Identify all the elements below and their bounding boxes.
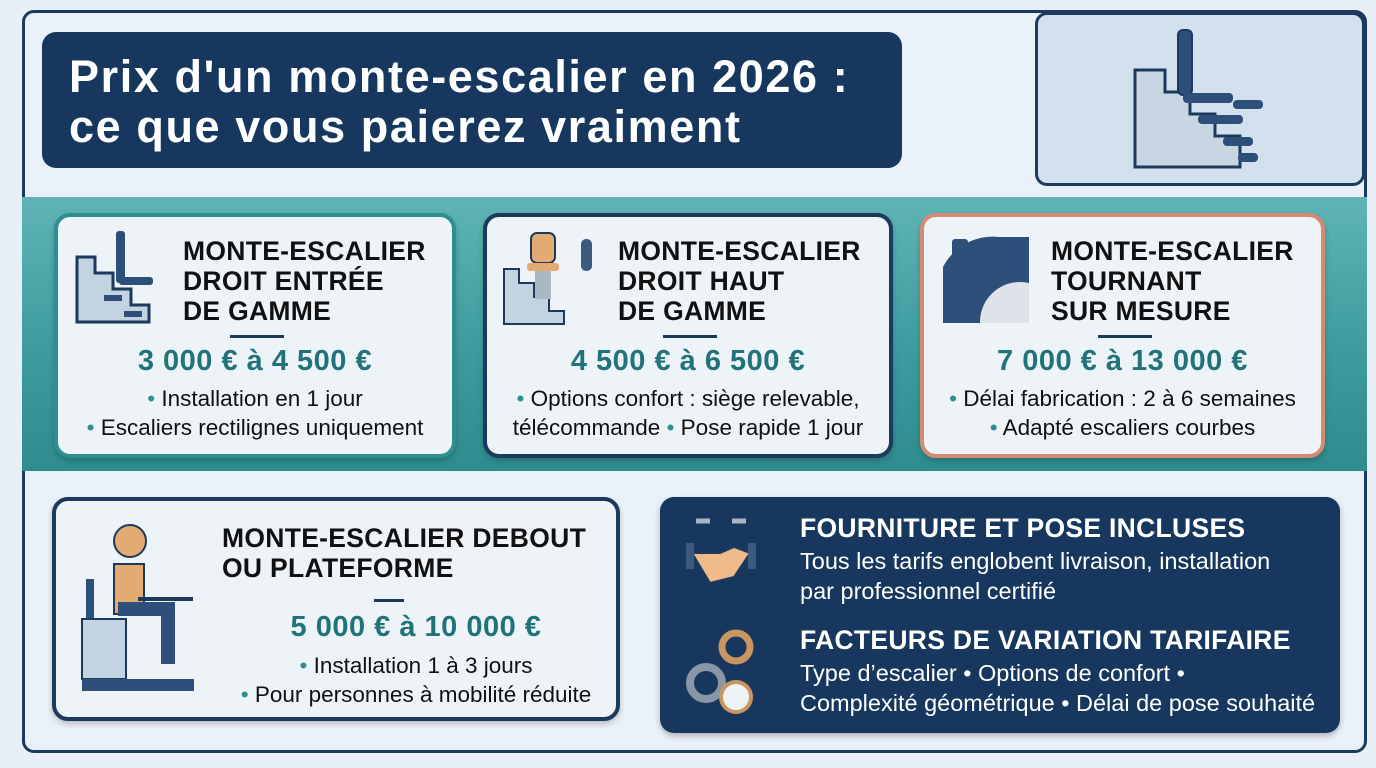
- title: MONTE-ESCALIER DEBOUT: [222, 523, 586, 553]
- bullets: [513, 386, 863, 440]
- title: [42, 32, 902, 168]
- heading: FACTEURS DE VARIATION TARIFAIRE: [800, 625, 1291, 655]
- bullets: [87, 386, 424, 440]
- icon: straight stairlift: [76, 231, 153, 324]
- text: Type d’escalier • Options de confort •: [800, 660, 1185, 686]
- price: 3 000 € à 4 500 €: [138, 345, 372, 377]
- price: 5 000 € à 10 000 €: [291, 611, 541, 643]
- bullets: • Installation 1 à 3 jours: [299, 653, 533, 678]
- text: par professionnel certifié: [800, 578, 1056, 604]
- icon: high-end stairlift: [503, 232, 592, 325]
- card 4: standing / platform: [52, 497, 620, 721]
- title: TOURNANT: [1051, 266, 1202, 296]
- title: DROIT ENTRÉE: [183, 266, 384, 296]
- text: Tous les tarifs englobent livraison, installation: [800, 548, 1270, 574]
- card 2: [483, 213, 893, 458]
- bullets: • Installation en 1 jour: [147, 386, 363, 411]
- title: Prix d'un monte-escalier en 2026 :: [69, 51, 849, 102]
- teal band: [22, 197, 1367, 471]
- icon: gears and clock: [686, 630, 754, 714]
- bullets: [949, 386, 1296, 440]
- text: [800, 548, 1270, 604]
- title: DE GAMME: [618, 296, 766, 326]
- title: DROIT HAUT: [618, 266, 784, 296]
- bullets: • Adapté escaliers courbes: [990, 415, 1255, 440]
- title: MONTE-ESCALIER: [183, 236, 426, 266]
- bullets: [241, 653, 591, 707]
- title: MONTE-ESCALIER: [618, 236, 861, 266]
- price: 7 000 € à 13 000 €: [997, 345, 1248, 377]
- panel: info: [660, 497, 1340, 733]
- title: SUR MESURE: [1051, 296, 1231, 326]
- text: [800, 660, 1315, 716]
- title: [183, 236, 426, 326]
- text: Complexité géométrique • Délai de pose souhaité: [800, 690, 1315, 716]
- title: MONTE-ESCALIER: [1051, 236, 1294, 266]
- heading: FOURNITURE ET POSE INCLUSES: [800, 513, 1245, 543]
- title: [222, 523, 586, 583]
- title: [618, 236, 861, 326]
- bullets: • Pour personnes à mobilité réduite: [241, 682, 591, 707]
- card 1: [54, 213, 456, 458]
- title: [1051, 236, 1294, 326]
- bullets: • Options confort : siège relevable,: [516, 386, 860, 411]
- card 3: [920, 213, 1325, 458]
- title: OU PLATEFORME: [222, 553, 454, 583]
- icon: seated person platform: [81, 524, 194, 691]
- title: ce que vous paierez vraiment: [69, 101, 742, 152]
- title: DE GAMME: [183, 296, 331, 326]
- bullets: télécommande • Pose rapide 1 jour: [513, 415, 863, 440]
- icon: stairlift header: [1035, 12, 1365, 186]
- icon: handshake: [686, 518, 756, 582]
- price: 4 500 € à 6 500 €: [571, 345, 805, 377]
- icon: curved stairlift: [943, 236, 1029, 323]
- bullets: • Délai fabrication : 2 à 6 semaines: [949, 386, 1296, 411]
- bullets: • Escaliers rectilignes uniquement: [87, 415, 423, 440]
